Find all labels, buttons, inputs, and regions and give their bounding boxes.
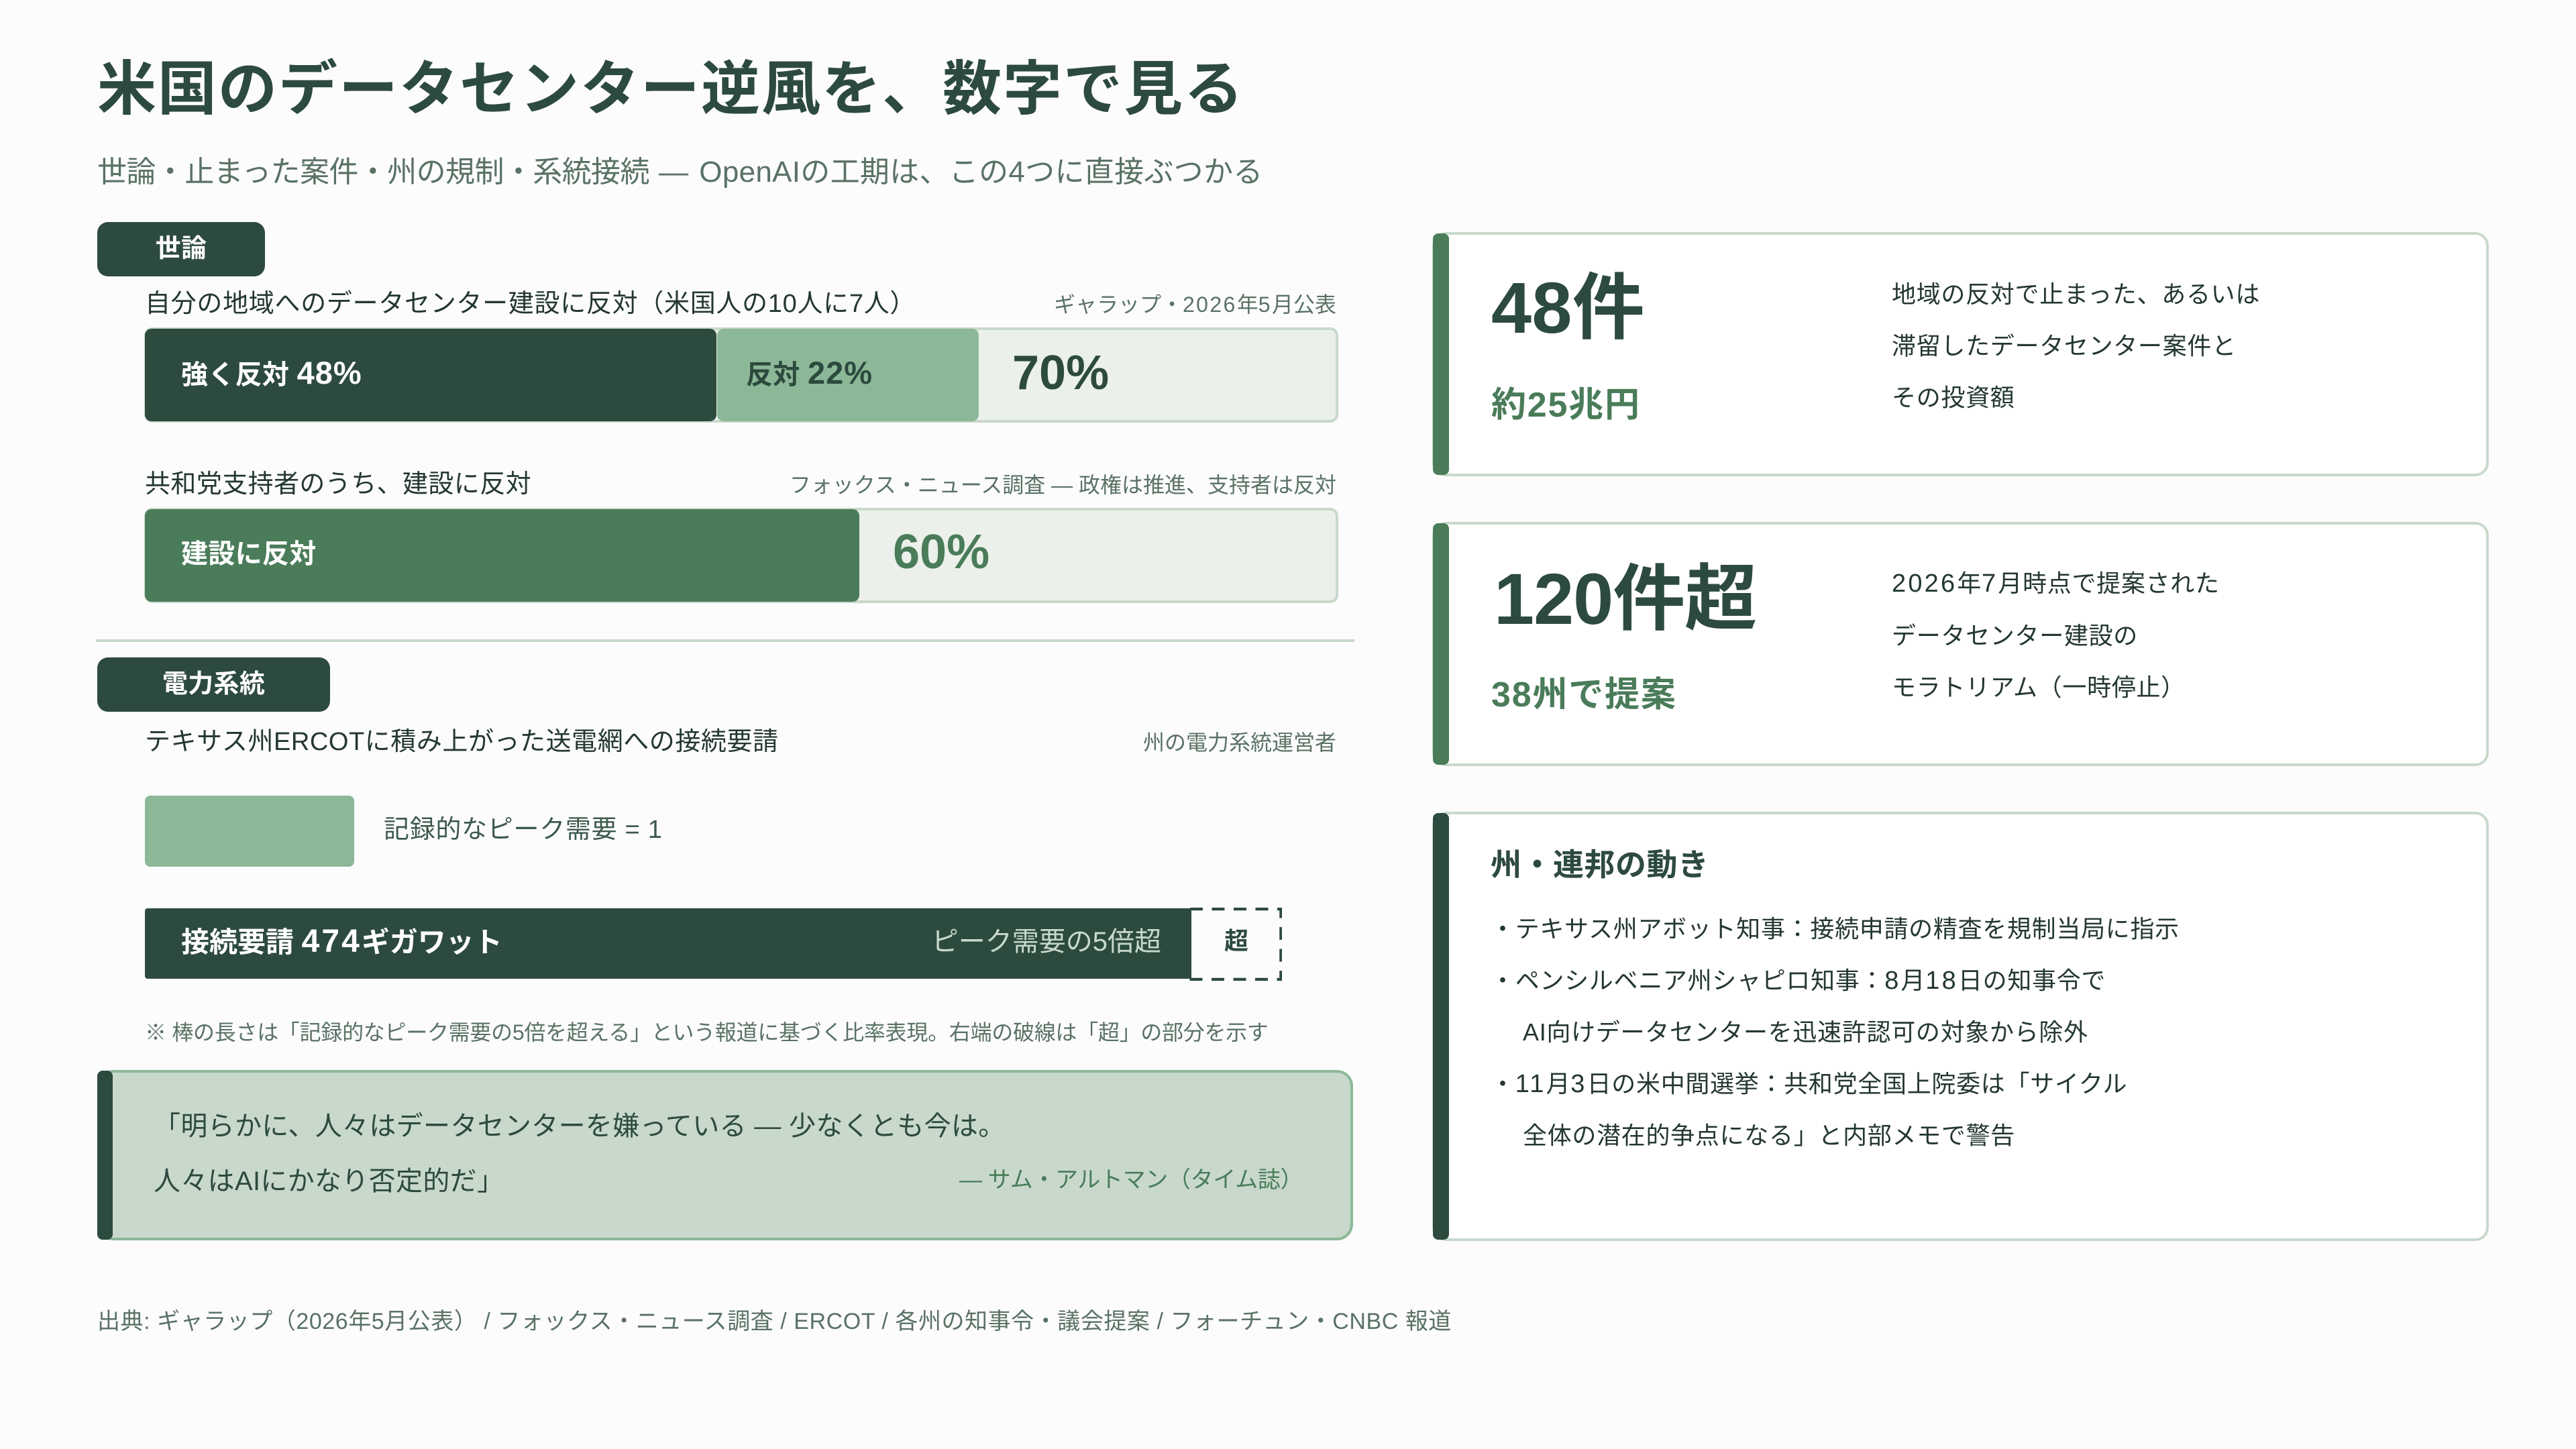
- title: 米国のデータセンター逆風を、数字で見る: [97, 56, 1244, 122]
- chart source: ギャラップ・2026年5月公表: [1054, 292, 1336, 317]
- bullet list: 全体の潜在的争点になる」と内部メモで警告: [1523, 1122, 2015, 1149]
- sub value: 38州で提案: [1491, 676, 1677, 714]
- bar track: [144, 508, 1338, 603]
- chart label: 自分の地域へのデータセンター建設に反対（米国人の10人に7人）: [145, 290, 916, 318]
- panel: Altman quote: [97, 1070, 1353, 1240]
- bar label: 接続要請 474ギガワット: [181, 924, 502, 959]
- chart source: フォックス・ニュース調査 — 政権は推進、支持者は反対: [790, 473, 1336, 497]
- footnote: ※ 棒の長さは「記録的なピーク需要の5倍を超える」という報道に基づく比率表現。右端の破線は「超」の部分を示す: [145, 1020, 1269, 1044]
- quote text: 人々はAIにかなり否定的だ」: [154, 1167, 504, 1196]
- quote text: [154, 1112, 1006, 1196]
- section tag: public opinion: [97, 222, 265, 276]
- description: 地域の反対で止まった、あるいは: [1892, 280, 2260, 308]
- accent bar: [1433, 233, 1449, 475]
- bullet list: ・テキサス州アボット知事：接続申請の精査を規制当局に指示: [1491, 915, 2180, 943]
- panel: stat 120 moratoria: [1432, 522, 2489, 766]
- value 60%: 60%: [893, 525, 989, 579]
- bullet list: AI向けデータセンターを迅速許認可の対象から除外: [1523, 1018, 2088, 1046]
- bullet list: ・ペンシルベニア州シャピロ知事：8月18日の知事令で: [1491, 967, 2106, 995]
- chart: Republican opposition bar: [144, 470, 1338, 603]
- quote text: 「明らかに、人々はデータセンターを嫌っている — 少なくとも今は。: [154, 1112, 1006, 1141]
- segment: strongly oppose 48%: [145, 329, 716, 421]
- panel: stat 48 projects: [1432, 232, 2489, 476]
- panel heading: 州・連邦の動き: [1491, 847, 1709, 882]
- bar: 474 GW connection requests: [145, 908, 1191, 979]
- panel: public opinion: [97, 222, 1338, 603]
- description: [1892, 570, 2220, 701]
- reference bar: peak demand: [145, 796, 354, 867]
- chart label: テキサス州ERCOTに積み上がった送電網への接続要請: [145, 728, 779, 756]
- quote accent bar: [97, 1071, 113, 1240]
- description: 2026年7月時点で提案された: [1892, 570, 2220, 598]
- section tag: power grid: [97, 657, 330, 712]
- segment: oppose 22%: [717, 329, 979, 421]
- description: モラトリアム（一時停止）: [1892, 674, 2186, 701]
- segment label: 強く反対 48%: [181, 355, 362, 390]
- quote attribution: — サム・アルトマン（タイム誌）: [959, 1167, 1303, 1193]
- segment: oppose 60%: [145, 509, 859, 602]
- sub value: 約25兆円: [1491, 386, 1641, 425]
- description: 滞留したデータセンター案件と: [1892, 332, 2237, 360]
- segment label: 建設に反対: [181, 539, 317, 569]
- dashed box: over: [1190, 908, 1282, 981]
- big number: 48件: [1491, 267, 1645, 348]
- description: その投資額: [1892, 384, 2015, 411]
- total value 70%: 70%: [1012, 346, 1109, 400]
- chart source: 州の電力系統運営者: [1143, 731, 1336, 755]
- description: [1892, 280, 2260, 411]
- bar track: [144, 327, 1338, 423]
- chart: local opposition bar: [144, 290, 1338, 423]
- segment label: 反対 22%: [746, 355, 873, 390]
- bullet list: ・11月3日の米中間選挙：共和党全国上院委は「サイクル: [1491, 1070, 2127, 1098]
- bullet list: [1491, 915, 2180, 1149]
- bar multiplier: ピーク需要の5倍超: [932, 927, 1161, 957]
- accent bar: [1433, 813, 1449, 1240]
- chart label: 共和党支持者のうち、建設に反対: [145, 470, 531, 498]
- footer sources: 出典: ギャラップ（2026年5月公表） / フォックス・ニュース調査 / ERCOT / 各州の知事令・議会提案 / フォーチュン・CNBC 報道: [97, 1309, 1452, 1334]
- accent bar: [1433, 523, 1449, 765]
- section tag: power grid: 電力系統: [162, 670, 265, 698]
- dashed box label: 超: [1224, 927, 1248, 955]
- description: データセンター建設の: [1892, 622, 2138, 649]
- section tag: public opinion: 世論: [156, 235, 207, 263]
- panel: power grid: [97, 657, 1336, 1044]
- reference bar label: 記録的なピーク需要 = 1: [384, 816, 663, 844]
- panel: state and federal moves: [1432, 812, 2489, 1241]
- big number: 120件超: [1494, 558, 1756, 639]
- subtitle: 世論・止まった案件・州の規制・系統接続 — OpenAIの工期は、この4つに直接ぶつかる: [97, 156, 1263, 189]
